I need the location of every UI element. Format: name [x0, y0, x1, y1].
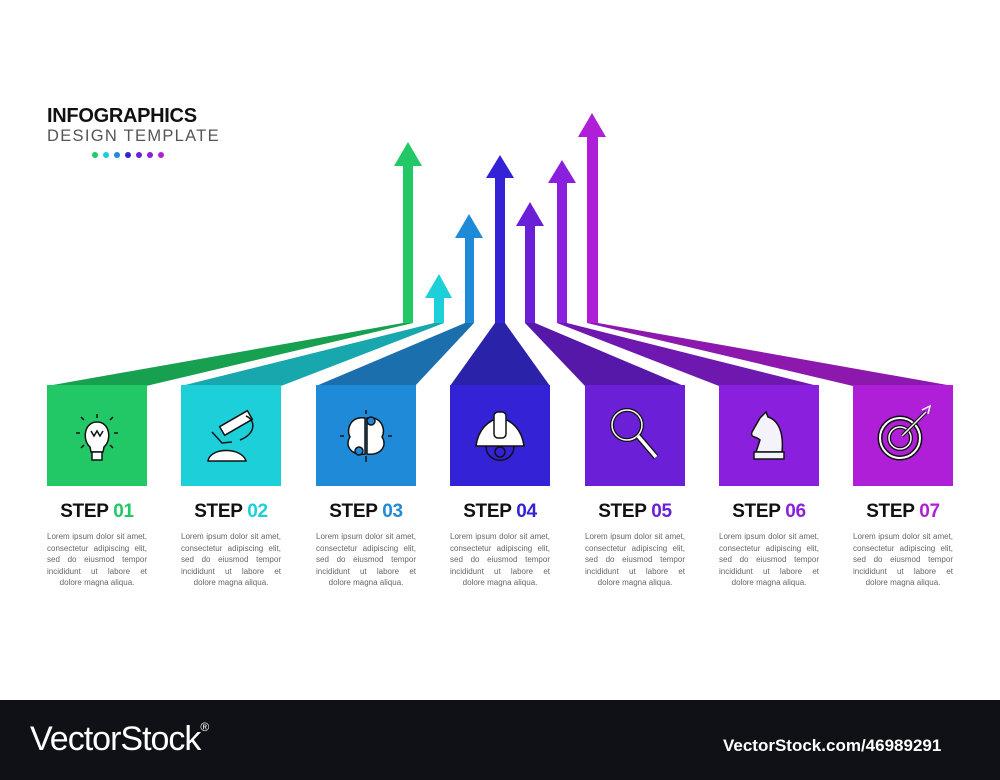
step 4 text [450, 532, 550, 587]
step 3 text: consectetur adipiscing elit, [316, 544, 416, 553]
step 7 text: incididunt ut labore et [853, 567, 953, 576]
step 7 text: dolore magna aliqua. [866, 578, 940, 587]
footer bar [0, 700, 1000, 780]
step 1 arrow [47, 142, 422, 486]
subtitle: DESIGN TEMPLATE [47, 127, 220, 145]
step 1 text: dolore magna aliqua. [60, 578, 134, 587]
step 7 label: STEP 07 [866, 501, 940, 522]
step 6 text: consectetur adipiscing elit, [719, 544, 819, 553]
icon: chess knight [752, 412, 784, 459]
step 2 label: STEP 02 [194, 501, 268, 522]
icon: light bulb [76, 414, 118, 460]
step 6 arrow [548, 160, 819, 486]
step 4 arrow [450, 155, 550, 486]
step 2 text: dolore magna aliqua. [194, 578, 268, 587]
step 5 text: sed do eiusmod tempor [585, 555, 685, 564]
step 1 text: Lorem ipsum dolor sit amet, [47, 532, 147, 541]
step 3 text: Lorem ipsum dolor sit amet, [316, 532, 416, 541]
step 6 label: STEP 06 [732, 501, 806, 522]
step 3 text: incididunt ut labore et [316, 567, 416, 576]
step 3 text: sed do eiusmod tempor [316, 555, 416, 564]
step 4 text: incididunt ut labore et [450, 567, 550, 576]
icon: target [880, 406, 930, 458]
icon: magnifier [612, 410, 656, 457]
step 2 text: sed do eiusmod tempor [181, 555, 281, 564]
step 5 text: incididunt ut labore et [585, 567, 685, 576]
step 4 label: STEP 04 [463, 501, 537, 522]
step 6 text [719, 532, 819, 587]
title: INFOGRAPHICS [47, 105, 197, 127]
step 3 label: STEP 03 [329, 501, 403, 522]
step 2 text: consectetur adipiscing elit, [181, 544, 281, 553]
step 5 label: STEP 05 [598, 501, 672, 522]
footer brand: VectorStock® [30, 720, 208, 758]
step 7 text: sed do eiusmod tempor [853, 555, 953, 564]
color dots [92, 152, 164, 158]
step 6 text: incididunt ut labore et [719, 567, 819, 576]
icon: brain [340, 410, 392, 462]
step 5 text: Lorem ipsum dolor sit amet, [585, 532, 685, 541]
icon: microscope [208, 411, 253, 461]
step 4 text: consectetur adipiscing elit, [450, 544, 550, 553]
step 4 text: dolore magna aliqua. [463, 578, 537, 587]
title block [47, 105, 220, 158]
step 4 text: Lorem ipsum dolor sit amet, [450, 532, 550, 541]
step 4 text: sed do eiusmod tempor [450, 555, 550, 564]
step 1 text: sed do eiusmod tempor [47, 555, 147, 564]
step 2 text: incididunt ut labore et [181, 567, 281, 576]
step 3 text: dolore magna aliqua. [329, 578, 403, 587]
step 1 label: STEP 01 [60, 501, 134, 522]
step 2 text [181, 532, 281, 587]
step 1 text: consectetur adipiscing elit, [47, 544, 147, 553]
step 6 text: Lorem ipsum dolor sit amet, [719, 532, 819, 541]
step 7 text: consectetur adipiscing elit, [853, 544, 953, 553]
step 5 text: dolore magna aliqua. [598, 578, 672, 587]
footer url: VectorStock.com/46989291 [723, 736, 941, 755]
step 7 arrow [578, 113, 953, 486]
step 5 text: consectetur adipiscing elit, [585, 544, 685, 553]
step 3 text [316, 532, 416, 587]
step 6 text: dolore magna aliqua. [732, 578, 806, 587]
icon: helmet with gear [476, 412, 524, 460]
step 7 text: Lorem ipsum dolor sit amet, [853, 532, 953, 541]
step 3 arrow [316, 214, 483, 486]
step 2 text: Lorem ipsum dolor sit amet, [181, 532, 281, 541]
step 5 arrow [516, 202, 685, 486]
step 6 text: sed do eiusmod tempor [719, 555, 819, 564]
step 1 text [47, 532, 147, 587]
step 1 text: incididunt ut labore et [47, 567, 147, 576]
step 7 text [853, 532, 953, 587]
step 2 arrow [181, 274, 452, 486]
step 5 text [585, 532, 685, 587]
